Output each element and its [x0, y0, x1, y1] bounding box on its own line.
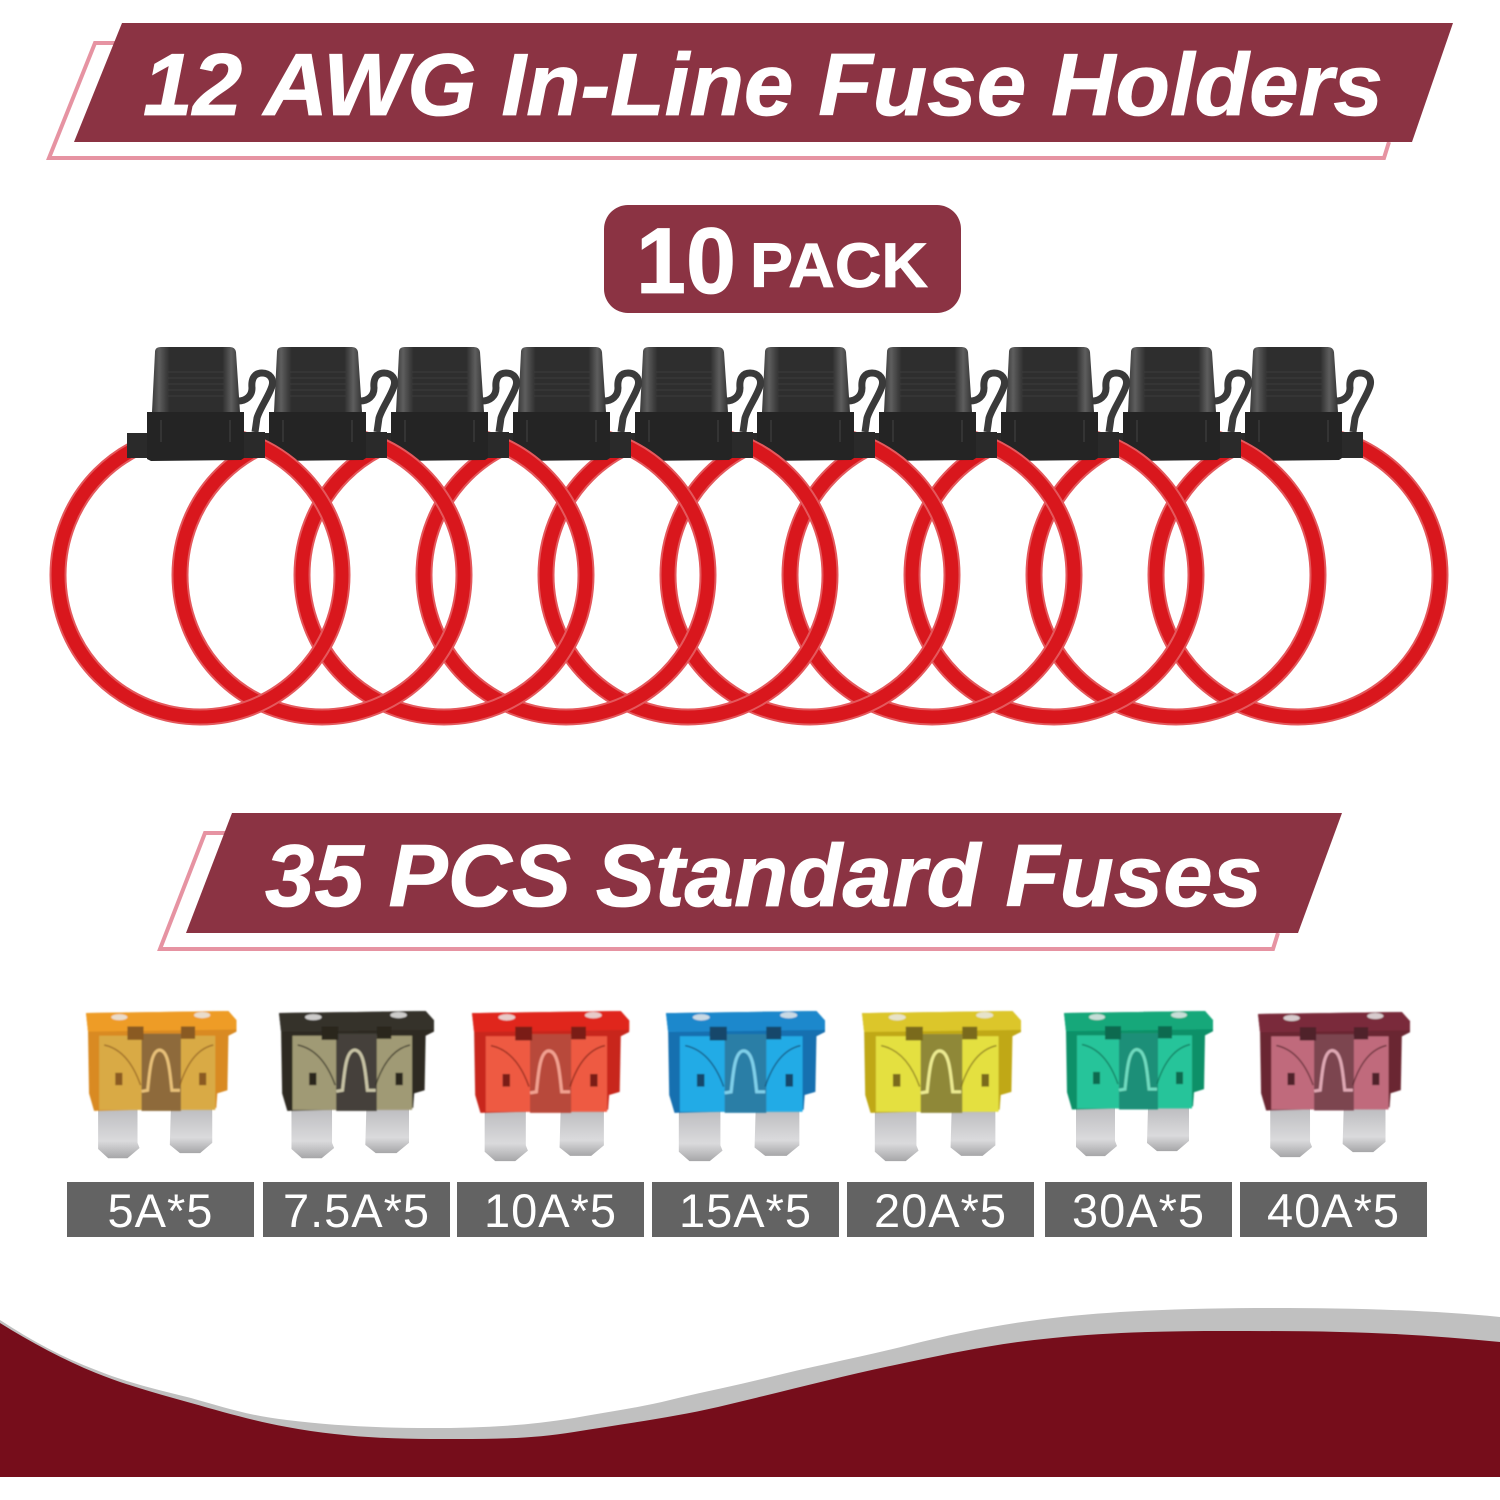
- label 5A: 5A*5: [108, 1184, 213, 1237]
- holder 9: [1034, 347, 1318, 717]
- holder 5: [546, 347, 830, 717]
- label 5A: [67, 1182, 254, 1237]
- holder 1: [58, 347, 342, 717]
- fuse 7.5A smoke: [279, 1011, 434, 1158]
- holder 2: [180, 347, 464, 717]
- badge word: PACK: [750, 231, 928, 301]
- fuse 10A red: [472, 1011, 629, 1161]
- holder 7: [790, 347, 1074, 717]
- fuse 20A yellow: [862, 1011, 1021, 1161]
- pack badge: [604, 205, 961, 313]
- banner pink outline: [49, 43, 1389, 158]
- fuse labels: [67, 1182, 1427, 1237]
- label 7.5A: 7.5A*5: [283, 1184, 430, 1237]
- label 40A: [1240, 1182, 1427, 1237]
- fuses banner pink outline: [160, 833, 1278, 949]
- label 30A: [1045, 1182, 1232, 1237]
- label 10A: 10A*5: [484, 1184, 617, 1237]
- holder 8: [912, 347, 1196, 717]
- label 30A: 30A*5: [1072, 1184, 1205, 1237]
- title banner: [49, 23, 1453, 158]
- fuse holders with red wire loops: [58, 347, 1440, 717]
- bottom wave: [0, 1308, 1500, 1477]
- holder 4: [424, 347, 708, 717]
- badge number: 10: [636, 208, 736, 313]
- label 20A: 20A*5: [874, 1184, 1007, 1237]
- maroon wave: [0, 1323, 1500, 1477]
- holder 3: [302, 347, 586, 717]
- fuse 15A blue: [666, 1011, 825, 1161]
- holder 6: [668, 347, 952, 717]
- fuse 40A maroon: [1258, 1012, 1410, 1157]
- fuses banner: [160, 813, 1342, 949]
- label 15A: [652, 1182, 839, 1237]
- title text: 12 AWG In-Line Fuse Holders: [143, 35, 1383, 134]
- label 15A: 15A*5: [679, 1184, 812, 1237]
- fuse 5A orange: [86, 1011, 236, 1158]
- holder 10: [1156, 347, 1440, 717]
- label 10A: [457, 1182, 644, 1237]
- fuses banner parallelogram: [186, 813, 1342, 933]
- fuse 30A green: [1064, 1011, 1213, 1156]
- banner parallelogram: [74, 23, 1453, 142]
- grey wave: [0, 1308, 1500, 1477]
- label 40A: 40A*5: [1267, 1184, 1400, 1237]
- label 20A: [847, 1182, 1034, 1237]
- fuses heading: 35 PCS Standard Fuses: [265, 826, 1262, 925]
